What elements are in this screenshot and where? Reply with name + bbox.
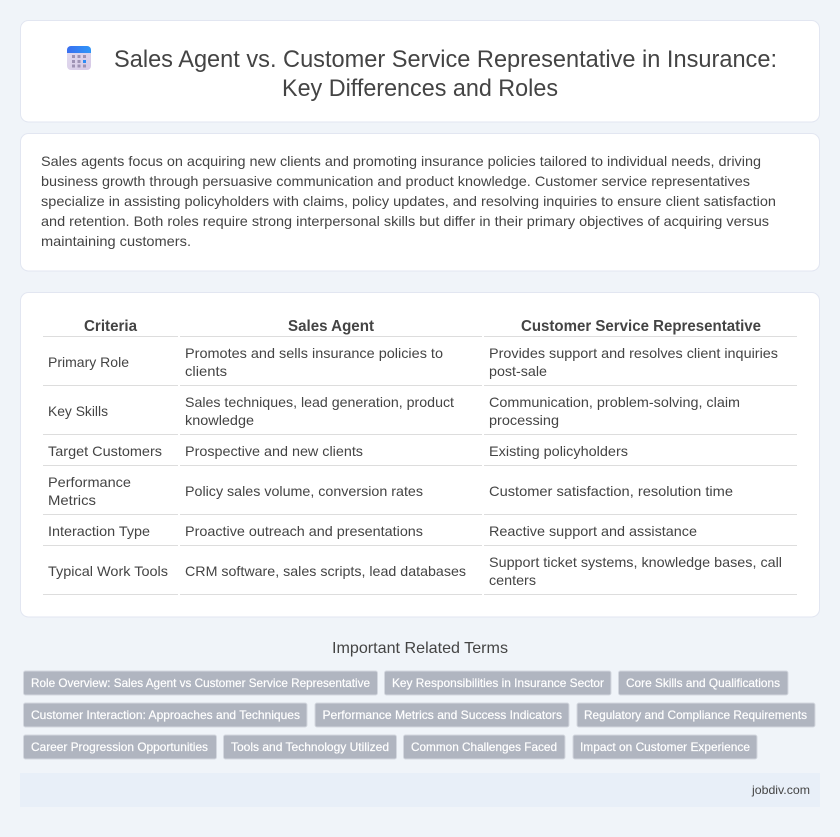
row: target customers (48, 443, 628, 459)
table rules (43, 336, 797, 595)
tag: core skills: Core Skills and Qualifications (626, 676, 780, 690)
row: typical work tools: Typical Work Tools (48, 563, 168, 579)
row: performance metrics: Metrics (48, 492, 96, 508)
panel: header (20, 20, 820, 122)
table header row (84, 318, 761, 335)
title: Sales Agent vs. Customer Service Representative in Insurance: (114, 46, 777, 73)
tag: tools and technology (224, 735, 396, 759)
row: typical work tools: centers (489, 572, 536, 588)
tag: role overview: Role Overview: Sales Agent vs Customer Service Representative (31, 676, 370, 690)
row: primary role: clients (185, 363, 227, 379)
tag: impact on customer experience: Impact on Customer Experience (580, 740, 750, 754)
tag: career progression (24, 735, 216, 759)
related term tags (24, 671, 815, 759)
row: key skills: Communication, problem-solving, claim (489, 394, 740, 410)
tag: career progression: Career Progression Opportunities (31, 740, 208, 754)
row: primary role: Promotes and sells insurance policies to (185, 345, 443, 361)
row: primary role: Provides support and resolves client inquiries (489, 345, 778, 361)
row: target customers: Prospective and new clients (185, 443, 363, 459)
row: target customers: Existing policyholders (489, 443, 628, 459)
row: key skills (48, 394, 740, 428)
row: typical work tools: CRM software, sales scripts, lead databases (185, 563, 466, 579)
summary text: and retention. Both roles require strong interpersonal skills but differ in their primary objectives of acquiring versus (41, 213, 769, 229)
tag: regulatory: Regulatory and Compliance Requirements (584, 708, 807, 722)
table header row: Customer Service Representative (521, 318, 761, 335)
row: primary role (48, 345, 778, 379)
tag: performance metrics: Performance Metrics and Success Indicators (322, 708, 562, 722)
row: primary role: post-sale (489, 363, 547, 379)
heading: important related terms: Important Related Terms (332, 640, 508, 657)
summary text: Sales agents focus on acquiring new clients and promoting insurance policies tailored to individual needs, driving (41, 153, 761, 169)
row: performance metrics: Policy sales volume, conversion rates (185, 483, 423, 499)
row: interaction type: Reactive support and assistance (489, 523, 697, 539)
tag: role overview (24, 671, 378, 695)
table header row: Sales Agent (288, 318, 375, 335)
tag: common challenges: Common Challenges Faced (411, 740, 557, 754)
tag: tools and technology: Tools and Technology Utilized (231, 740, 389, 754)
footer (20, 773, 820, 807)
tag: customer interaction (24, 703, 307, 727)
summary text: business growth through persuasive communication and product knowledge. Customer service representatives (41, 173, 750, 189)
icon: calendar (67, 46, 91, 70)
summary text: maintaining customers. (41, 233, 191, 249)
tag: regulatory (577, 703, 815, 727)
tag: core skills (618, 671, 788, 695)
row: key skills: Key Skills (48, 403, 108, 419)
row: performance metrics (48, 474, 733, 508)
tag: key responsibilities (384, 671, 611, 695)
row: key skills: knowledge (185, 412, 254, 428)
row: target customers: Target Customers (48, 443, 162, 459)
panel: summary paragraph (20, 134, 820, 271)
tag: impact on customer experience (573, 735, 757, 759)
row: key skills: processing (489, 412, 559, 428)
row: key skills: Sales techniques, lead generation, product (185, 394, 454, 410)
tag: performance metrics (315, 703, 569, 727)
row: typical work tools (48, 554, 782, 588)
row: performance metrics: Customer satisfaction, resolution time (489, 483, 733, 499)
tag: common challenges (404, 735, 565, 759)
row: primary role: Primary Role (48, 354, 129, 370)
row: interaction type (48, 523, 697, 539)
title (114, 46, 777, 102)
tag: customer interaction: Customer Interaction: Approaches and Techniques (31, 708, 300, 722)
tag: key responsibilities: Key Responsibilities in Insurance Sector (392, 676, 604, 690)
footer: jobdiv.com (751, 783, 810, 797)
summary text (41, 153, 776, 249)
row: interaction type: Interaction Type (48, 523, 150, 539)
table header row: Criteria (84, 318, 137, 335)
title: Key Differences and Roles (282, 75, 558, 102)
summary text: specialize in assisting policyholders with claims, policy updates, and resolving inquiries to ensure client satisfaction (41, 193, 776, 209)
row: interaction type: Proactive outreach and presentations (185, 523, 423, 539)
row: performance metrics: Performance (48, 474, 131, 490)
row: typical work tools: Support ticket systems, knowledge bases, call (489, 554, 782, 570)
panel: comparison table (20, 292, 820, 617)
